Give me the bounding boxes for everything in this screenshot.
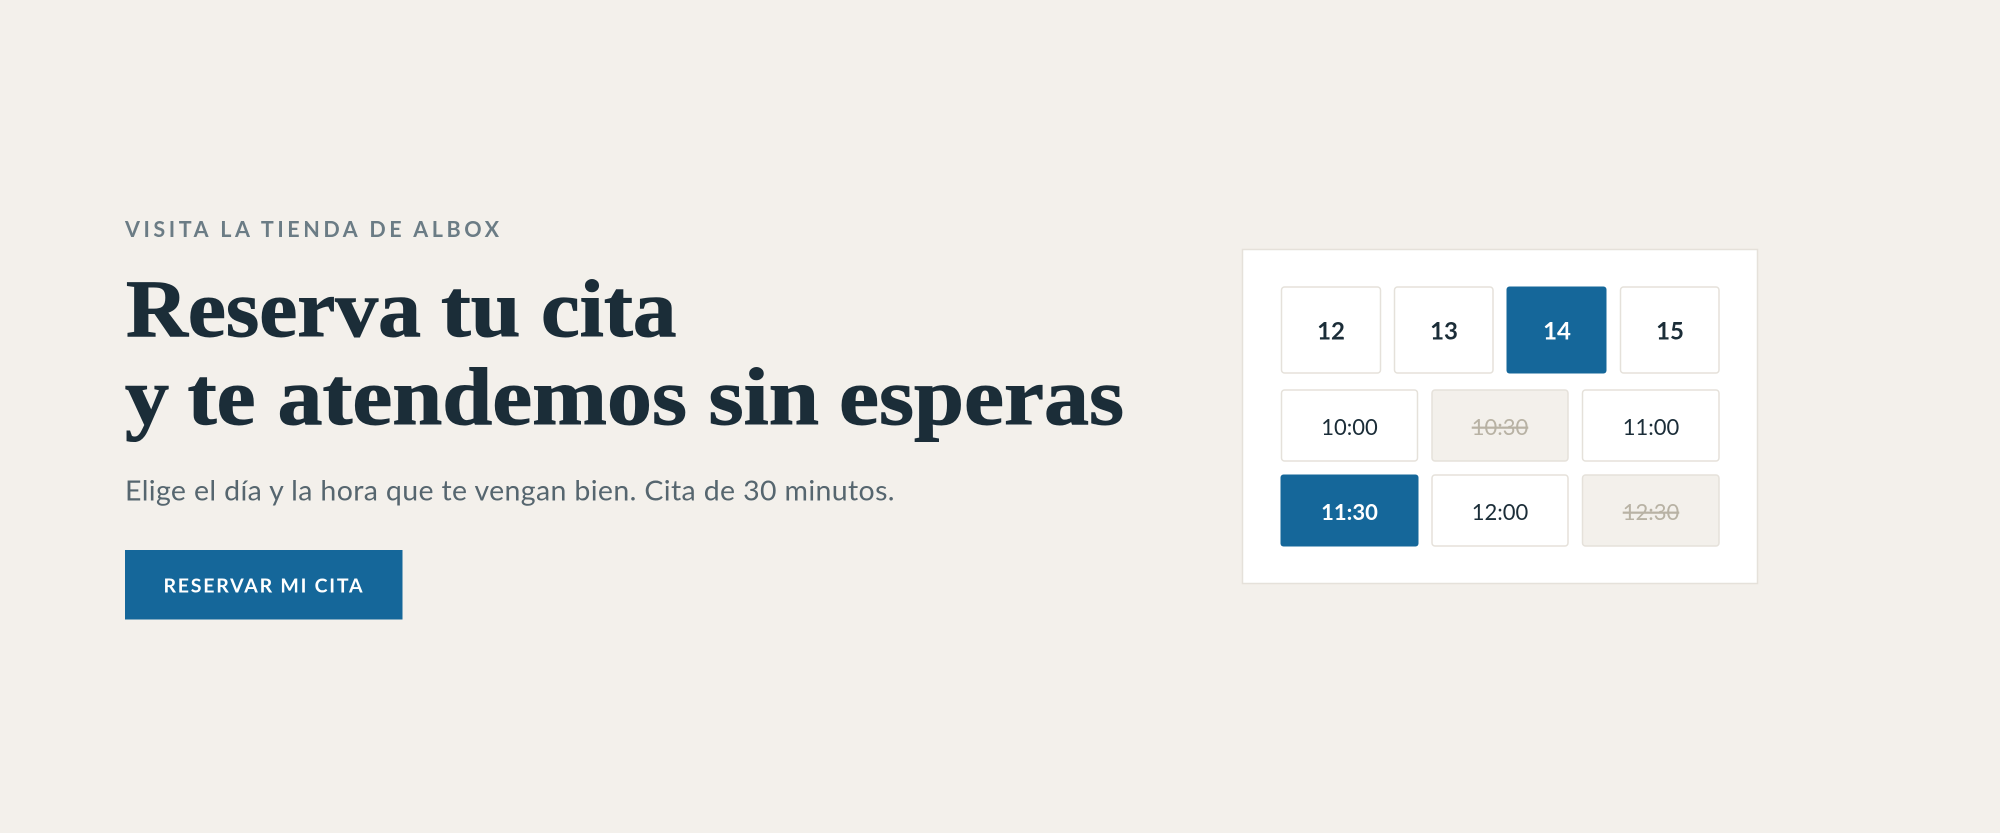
time 11:00: 11:00 [1623,413,1680,440]
title: cita [541,263,676,354]
time 10:30 unavailable: 10:30 [1472,413,1529,440]
day 14 selected: 14 [1543,316,1571,346]
time 10:00 [1282,390,1418,461]
day 15 [1620,287,1719,373]
title: y [125,351,169,442]
time 11:30 selected [1280,474,1418,546]
title: tu [441,263,520,354]
day 12: 12 [1317,316,1345,346]
button: reservar mi cita: RESERVAR MI CITA [164,574,363,597]
title: esperas [839,351,1124,442]
time 11:30 selected: 11:30 [1321,498,1378,525]
time 12:30 unavailable [1582,475,1719,546]
kicker: VISITA LA TIENDA DE ALBOX [124,216,500,242]
title: sin [708,351,819,442]
time 12:00 [1432,475,1568,546]
time 10:30 unavailable [1432,390,1568,461]
subtitle: Elige el día y la hora que te vengan bien. Cita de 30 minutos. [125,474,894,508]
title: Reserva [126,263,421,354]
day 15: 15 [1656,316,1684,346]
title: te [188,351,256,442]
title [125,263,1124,442]
day 13: 13 [1430,316,1458,346]
title: atendemos [278,351,687,442]
time 12:30 unavailable: 12:30 [1623,498,1680,525]
day 13 [1394,287,1493,373]
time 12:00: 12:00 [1472,498,1529,525]
time 11:00 [1582,390,1719,461]
panel: booking widget [1242,250,1758,584]
button: reservar mi cita [125,550,402,620]
day 12 [1282,287,1380,373]
time 10:00: 10:00 [1321,413,1378,440]
day 14 selected [1506,286,1606,374]
